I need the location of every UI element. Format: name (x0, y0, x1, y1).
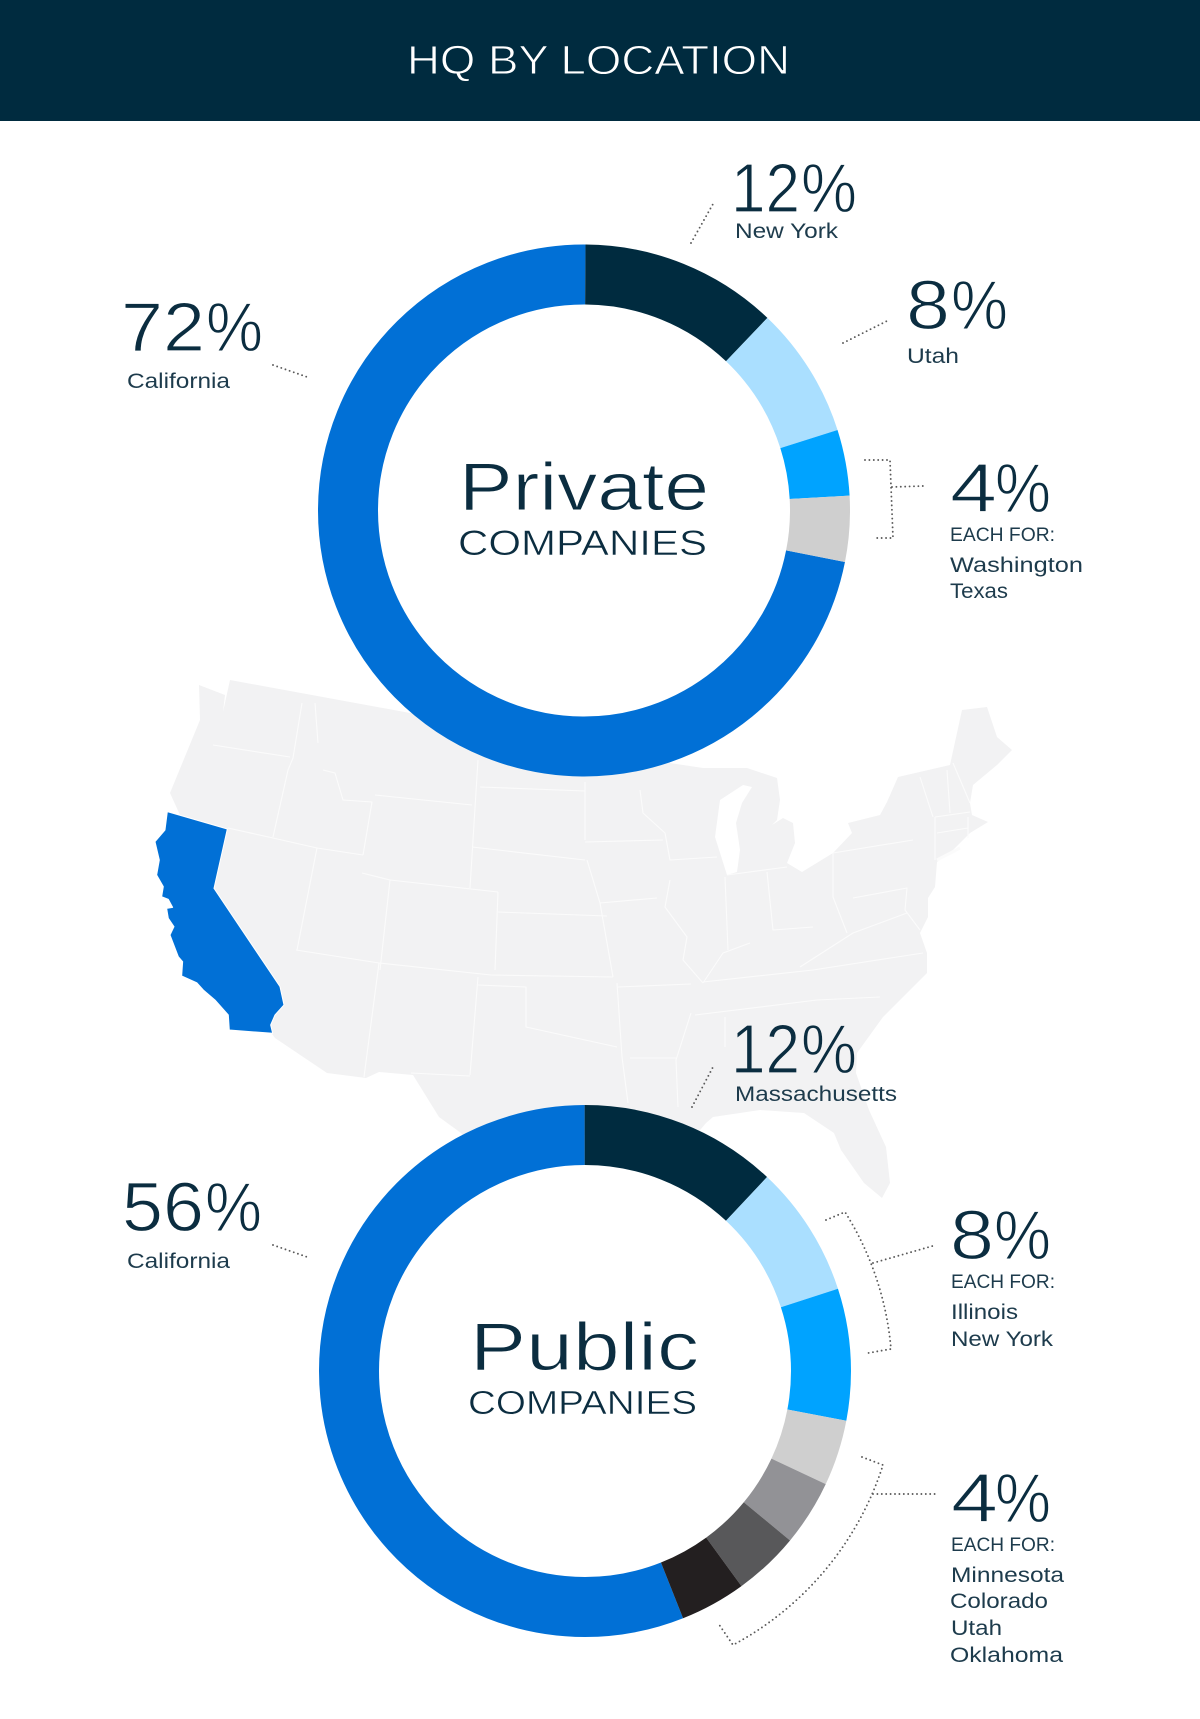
callout: California 72% (121, 288, 310, 393)
callout: California 72%: % (206, 288, 263, 366)
title: HQ BY LOCATION (407, 37, 790, 83)
callout: New York 12%: 12 (731, 149, 800, 227)
callout: Utah 8%: 8 (906, 266, 950, 344)
segment: Washington 4% (346, 273, 822, 748)
segment: New York 12% (346, 273, 822, 748)
segment: California 56% (349, 1135, 821, 1607)
segment: Utah 8% (346, 273, 822, 748)
callout: Utah 8% (843, 266, 1008, 368)
callout: Massachusetts 12%: 12 (731, 1010, 800, 1088)
segment: Oklahoma 4% (349, 1135, 821, 1607)
donut label: Private Companies: COMPANIES (458, 524, 707, 563)
callout: Washington and Texas 4% each: Washington (950, 554, 1083, 577)
segment: California 72% (346, 273, 822, 748)
map: state borders (213, 703, 970, 1107)
map: California highlight (155, 812, 284, 1033)
segment: Illinois 8% (349, 1135, 821, 1607)
donut label: Private Companies (458, 449, 709, 563)
callout: California 56%: 56 (122, 1168, 204, 1246)
callout: Utah 8%: % (951, 266, 1008, 344)
callout: Washington and Texas 4% each: Texas (950, 580, 1008, 603)
callout: Minnesota, Colorado, Utah and Oklahoma 4% each: Utah (951, 1617, 1002, 1640)
segment: New York 8% (349, 1135, 821, 1607)
callout: California 56%: California (127, 1250, 230, 1273)
callout: Minnesota, Colorado, Utah and Oklahoma 4% each (718, 1457, 1064, 1667)
callout: Minnesota, Colorado, Utah and Oklahoma 4% each: 4 (951, 1459, 998, 1537)
donut label: Private Companies: Private (459, 449, 709, 525)
map: Lake Michigan (715, 785, 752, 875)
segment: Utah 4% (349, 1135, 821, 1607)
callout: Utah 8%: Utah (907, 345, 959, 368)
map: United States (155, 650, 1012, 1250)
callout: California 72%: California (127, 370, 230, 393)
callout: Illinois and New York 8% each (826, 1196, 1055, 1353)
callout: Illinois and New York 8% each: New York (951, 1328, 1054, 1351)
callout: Massachusetts 12%: % (801, 1010, 857, 1088)
callout: California 72%: 72 (121, 288, 205, 366)
callout: Massachusetts 12%: Massachusetts (735, 1083, 897, 1106)
callout: Illinois and New York 8% each: 8 (950, 1196, 994, 1274)
segment: Texas 4% (346, 273, 822, 748)
callout: California 56%: % (205, 1168, 262, 1246)
callout: Illinois and New York 8% each: EACH FOR: (951, 1272, 1055, 1293)
donut chart: private companies (346, 273, 822, 748)
callout: Minnesota, Colorado, Utah and Oklahoma 4% each: % (995, 1459, 1051, 1537)
callout: Illinois and New York 8% each: % (994, 1196, 1051, 1274)
callout: Illinois and New York 8% each: Illinois (951, 1301, 1018, 1324)
callout: Washington and Texas 4% each: 4 (950, 449, 997, 527)
callout: Washington and Texas 4% each: EACH FOR: (950, 525, 1055, 546)
callout: Massachusetts 12% (692, 1010, 897, 1107)
callout: New York 12% (691, 149, 857, 243)
segment: Colorado 4% (349, 1135, 821, 1607)
callout: New York 12%: % (801, 149, 857, 227)
donut label: Public Companies: COMPANIES (468, 1384, 697, 1421)
callout: Minnesota, Colorado, Utah and Oklahoma 4% each: EACH FOR: (951, 1535, 1055, 1556)
segment: Massachusetts 12% (349, 1135, 821, 1607)
donut label: Public Companies: Public (470, 1309, 699, 1385)
callout: Washington and Texas 4% each (865, 449, 1083, 603)
callout: Washington and Texas 4% each: % (995, 449, 1051, 527)
segment: Minnesota 4% (349, 1135, 821, 1607)
donut label: Public Companies (468, 1309, 699, 1421)
donut chart: public companies (349, 1135, 821, 1607)
callout: Minnesota, Colorado, Utah and Oklahoma 4% each: Oklahoma (950, 1644, 1063, 1667)
callout: Minnesota, Colorado, Utah and Oklahoma 4% each: Colorado (950, 1590, 1048, 1613)
header bar (0, 0, 1200, 121)
callout: California 56% (122, 1168, 310, 1273)
callout: New York 12%: New York (735, 220, 839, 243)
callout: Minnesota, Colorado, Utah and Oklahoma 4% each: Minnesota (951, 1564, 1064, 1587)
map: land silhouette (170, 650, 1012, 1250)
